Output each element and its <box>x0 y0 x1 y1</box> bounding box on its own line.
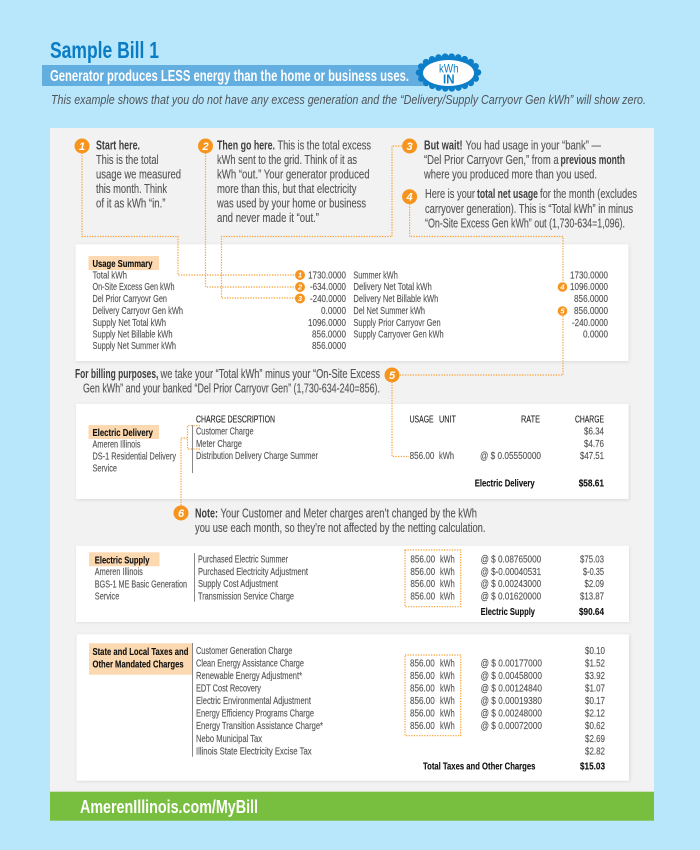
supply service description: Service <box>95 590 119 602</box>
callout 2: then go here: kWh sent to the grid. Think of it as <box>217 153 357 167</box>
callout 2: then go here: Then go here. <box>217 138 275 152</box>
tax rows: kWh <box>440 658 455 670</box>
icon: kWh in badge: kWh <box>439 62 458 76</box>
panel: taxes and mandated charges <box>77 634 630 782</box>
callout 1: start here: usage we measured <box>96 168 181 182</box>
tax rows: kWh <box>440 720 455 732</box>
supply rows: $-0.35 <box>583 566 604 578</box>
supply rows: Transmission Service Charge <box>198 590 294 602</box>
supply total: $90.64 <box>579 606 604 618</box>
callout 3: but wait: 3 <box>407 141 413 153</box>
callout 1: start here: 1 <box>79 141 85 153</box>
tax rows: 856.00 <box>410 658 435 670</box>
tax rows: kWh <box>440 683 455 695</box>
callout 3: but wait: where you produced more than you used. <box>423 168 597 182</box>
tax rows: Customer Generation Charge <box>196 645 292 657</box>
supply total: Electric Supply <box>481 606 535 618</box>
tax rows: kWh <box>440 670 455 682</box>
callout 2: then go here: and never made it “out.” <box>217 211 319 225</box>
usage values left column: 856.0000 <box>312 340 346 352</box>
callout 4: total net usage: 4 <box>406 192 413 204</box>
heading: electric delivery: Electric Delivery <box>92 427 153 439</box>
tax rows: 856.00 <box>410 683 435 695</box>
callout 1: start here: This is the total <box>96 153 159 167</box>
heading: state and local taxes <box>89 643 192 675</box>
tax rows: $0.17 <box>585 695 605 707</box>
delivery rows: 856.00 <box>410 450 435 462</box>
supply rows: 856.00 <box>410 590 435 602</box>
tax rows: $3.92 <box>585 670 605 682</box>
usage values right column: 1096.0000 <box>570 281 608 293</box>
delivery total: $58.61 <box>579 478 604 490</box>
supply service description: BGS-1 ME Basic Generation <box>95 578 187 590</box>
supply rows: 856.00 <box>410 554 435 566</box>
tax rows: @ $ 0.00458000 <box>481 670 542 682</box>
marker badges on usage summary <box>295 270 567 316</box>
supply rows: Supply Cost Adjustment <box>198 578 278 590</box>
tax rows: Clean Energy Assistance Charge <box>196 658 304 670</box>
heading: electric delivery <box>88 425 159 439</box>
usage labels right column: Delivery Net Total kWh <box>353 281 432 293</box>
delivery rows: Meter Charge <box>196 438 242 450</box>
callout 4: total net usage: “On-Site Excess Gen kWh” out (1,730-634=1,096). <box>425 216 625 230</box>
callout 2: then go here <box>198 138 371 287</box>
callout 5: billing purposes: Gen kWh” and your banked “Del Prior Carryovr Gen” (1,730-634-240=856). <box>83 382 380 396</box>
callout 1: start here: of it as kWh “in.” <box>96 196 166 210</box>
callout 6: note: you use each month, so they’re not affected by the netting calculation. <box>195 521 486 535</box>
usage labels left column: Supply Net Billable kWh <box>92 328 173 340</box>
table header: USAGE <box>410 414 434 426</box>
marker badges on usage summary: 2 <box>297 283 303 292</box>
supply rows: kWh <box>440 554 455 566</box>
tax rows: @ $ 0.00072000 <box>481 720 542 732</box>
supply total <box>481 606 604 618</box>
delivery rows <box>196 426 604 462</box>
callout 3: but wait: previous month <box>560 153 625 167</box>
tax rows: Electric Environmental Adjustment <box>196 695 311 707</box>
usage labels left column <box>92 270 183 352</box>
icon: kWh in badge <box>418 56 478 89</box>
delivery service description: Ameren Illinois <box>92 438 140 450</box>
dotted box: supply usage <box>405 550 461 607</box>
callout 4: total net usage: for the month (excludes <box>540 187 637 201</box>
supply rows: Purchased Electric Summer <box>198 554 288 566</box>
marker badges on usage summary: 5 <box>560 307 565 316</box>
callout 5: billing purposes: 5 <box>389 370 396 382</box>
delivery total <box>475 478 604 490</box>
delivery rows: $47.51 <box>580 450 604 462</box>
usage labels left column: Total kWh <box>92 270 127 282</box>
usage values left column: -634.0000 <box>310 281 346 293</box>
tax rows: $2.69 <box>585 733 605 745</box>
heading: electric supply <box>89 552 160 566</box>
dotted box: taxes usage <box>405 655 461 736</box>
usage labels right column: Supply Prior Carryovr Gen <box>353 317 441 329</box>
table header: CHARGE <box>575 414 604 426</box>
callout 1: start here <box>74 138 296 275</box>
callout 6: note <box>174 426 486 535</box>
usage values left column: 0.0000 <box>321 305 346 317</box>
supply rows: kWh <box>440 590 455 602</box>
tax rows: $0.62 <box>585 720 605 732</box>
supply rows: $75.03 <box>580 554 604 566</box>
callout 3: but wait <box>222 138 625 298</box>
callout 5: billing purposes <box>75 316 563 456</box>
panel: electric supply <box>76 546 630 622</box>
tax rows: $0.10 <box>585 645 605 657</box>
callout 2: then go here: 2 <box>201 141 209 153</box>
callout 5: billing purposes: For billing purposes, <box>75 367 158 381</box>
usage labels left column: Supply Net Summer kWh <box>92 340 176 352</box>
tax rows: Energy Transition Assistance Charge* <box>196 720 323 732</box>
supply service description <box>95 566 187 602</box>
supply rows: kWh <box>440 578 455 590</box>
heading: state and local taxes: State and Local Taxes and <box>92 646 188 658</box>
usage values left column: 1730.0000 <box>308 270 346 282</box>
tax rows: Nebo Municipal Tax <box>196 733 263 745</box>
heading: state and local taxes: Other Mandated Charges <box>92 658 184 670</box>
callout 6: note: Your Customer and Meter charges aren’t changed by the kWh <box>220 507 477 521</box>
usage values right column: 0.0000 <box>583 328 608 340</box>
callout 2: then go here: was used by your home or business <box>216 196 366 210</box>
tax rows: 856.00 <box>410 670 435 682</box>
heading: usage summary: Usage Summary <box>92 258 153 270</box>
usage labels right column: Del Net Summer kWh <box>353 305 425 317</box>
callout 5: billing purposes: we take your “Total kWh” minus your “On-Site Excess <box>160 367 380 381</box>
callout 1: start here: Start here. <box>96 138 140 152</box>
usage values left column: -240.0000 <box>310 293 346 305</box>
delivery rows: Distribution Delivery Charge Summer <box>196 450 318 462</box>
delivery service description <box>92 438 177 474</box>
icon: kWh in badge: IN <box>443 72 454 86</box>
usage values right column: 1730.0000 <box>570 270 608 282</box>
footer bar <box>50 792 654 821</box>
supply rows: @ $ 0.00243000 <box>481 578 541 590</box>
tax rows: Renewable Energy Adjustment* <box>196 670 302 682</box>
delivery rows: @ $ 0.05550000 <box>480 450 541 462</box>
marker badges on usage summary: 4 <box>559 283 565 292</box>
callout 6: note: Note: <box>195 507 218 521</box>
callout 4: total net usage: total net usage <box>477 187 538 201</box>
tax rows: $1.52 <box>585 658 605 670</box>
heading: usage summary <box>88 256 159 270</box>
callout 4: total net usage <box>402 187 637 282</box>
marker badges on usage summary: 1 <box>298 271 302 280</box>
callout 2: then go here: more than this, but that electricity <box>217 182 357 196</box>
delivery rows: kWh <box>439 450 454 462</box>
callout 3: but wait: But wait! <box>424 138 463 152</box>
panel: grey background <box>50 128 654 793</box>
supply rows: @ $ 0.01620000 <box>481 590 541 602</box>
supply rows: @ $-0.00040531 <box>481 566 541 578</box>
supply rows: $2.09 <box>584 578 604 590</box>
usage values right column: 856.0000 <box>574 293 608 305</box>
tax rows: $2.82 <box>585 746 605 758</box>
callout 4: total net usage: carryover generation). This is “Total kWh” in minus <box>425 202 633 216</box>
tax rows: $1.07 <box>585 683 605 695</box>
tax rows <box>196 645 605 758</box>
usage values right column: -240.0000 <box>572 317 608 329</box>
supply rows: 856.00 <box>410 566 435 578</box>
banner: generator produces less energy: Generator produces LESS energy than the home or business uses. <box>50 68 409 85</box>
table header: CHARGE DESCRIPTION <box>196 414 275 426</box>
supply rows: 856.00 <box>410 578 435 590</box>
table header: UNIT <box>439 414 456 426</box>
tax rows: Energy Efficiency Programs Charge <box>196 708 314 720</box>
tax rows: Illinois State Electricity Excise Tax <box>196 746 312 758</box>
usage labels left column: Delivery Carryovr Gen kWh <box>92 305 183 317</box>
delivery service description: DS-1 Residential Delivery <box>92 450 177 462</box>
tax rows: @ $ 0.00177000 <box>481 658 542 670</box>
callout 1: start here: this month. Think <box>96 182 168 196</box>
tax rows: kWh <box>440 695 455 707</box>
usage labels right column <box>353 270 444 340</box>
tax rows: kWh <box>440 708 455 720</box>
supply rows: Purchased Electricity Adjustment <box>198 566 308 578</box>
callout 6: note: 6 <box>178 508 185 520</box>
usage labels left column: Supply Net Total kWh <box>92 317 166 329</box>
usage values right column <box>570 270 608 340</box>
usage labels right column: Delivery Net Billable kWh <box>353 293 439 305</box>
callout 2: then go here: This is the total excess <box>278 138 371 152</box>
heading: electric supply: Electric Supply <box>95 554 150 566</box>
tax rows: $2.12 <box>585 708 605 720</box>
panel: usage summary <box>76 244 629 362</box>
footer bar: AmerenIllinois.com/MyBill <box>80 796 258 817</box>
table header <box>196 414 604 426</box>
tax rows: 856.00 <box>410 695 435 707</box>
banner: generator produces less energy <box>42 65 427 86</box>
tax rows: 856.00 <box>410 720 435 732</box>
delivery service description: Service <box>92 462 117 474</box>
callout 3: but wait: “Del Prior Carryovr Gen,” from a <box>424 153 559 167</box>
usage labels left column: On-Site Excess Gen kWh <box>92 281 175 293</box>
callout 4: total net usage: Here is your <box>425 187 475 201</box>
supply rows: kWh <box>440 566 455 578</box>
supply rows: @ $ 0.08765000 <box>481 554 541 566</box>
taxes total: Total Taxes and Other Charges <box>423 761 536 773</box>
tax rows: EDT Cost Recovery <box>196 683 262 695</box>
table header: RATE <box>521 414 540 426</box>
marker badges on usage summary: 3 <box>298 294 303 303</box>
delivery total: Electric Delivery <box>475 478 535 490</box>
supply rows <box>198 554 604 602</box>
supply rows: $13.87 <box>580 590 604 602</box>
callout 2: then go here: kWh “out.” Your generator produced <box>217 168 370 182</box>
usage values left column <box>308 270 346 352</box>
taxes total: $15.03 <box>580 761 605 773</box>
usage values right column: 856.0000 <box>574 305 608 317</box>
title: Sample Bill 1 <box>50 37 159 63</box>
tax rows: 856.00 <box>410 708 435 720</box>
supply service description: Ameren Illinois <box>95 566 143 578</box>
panel: electric delivery <box>76 404 630 500</box>
usage values left column: 856.0000 <box>312 328 346 340</box>
delivery rows: $6.34 <box>584 426 604 438</box>
usage labels right column: Supply Carryover Gen kWh <box>353 328 444 340</box>
usage labels left column: Del Prior Carryovr Gen <box>92 293 167 305</box>
tax rows: @ $ 0.00019380 <box>481 695 542 707</box>
callout 3: but wait: You had usage in your “bank” — <box>466 138 601 152</box>
delivery rows: Customer Charge <box>196 426 254 438</box>
tax rows: @ $ 0.00124840 <box>481 683 542 695</box>
delivery rows: $4.76 <box>584 438 604 450</box>
usage values left column: 1096.0000 <box>308 317 346 329</box>
usage labels right column: Summer kWh <box>353 270 398 282</box>
tax rows: @ $ 0.00248000 <box>481 708 542 720</box>
